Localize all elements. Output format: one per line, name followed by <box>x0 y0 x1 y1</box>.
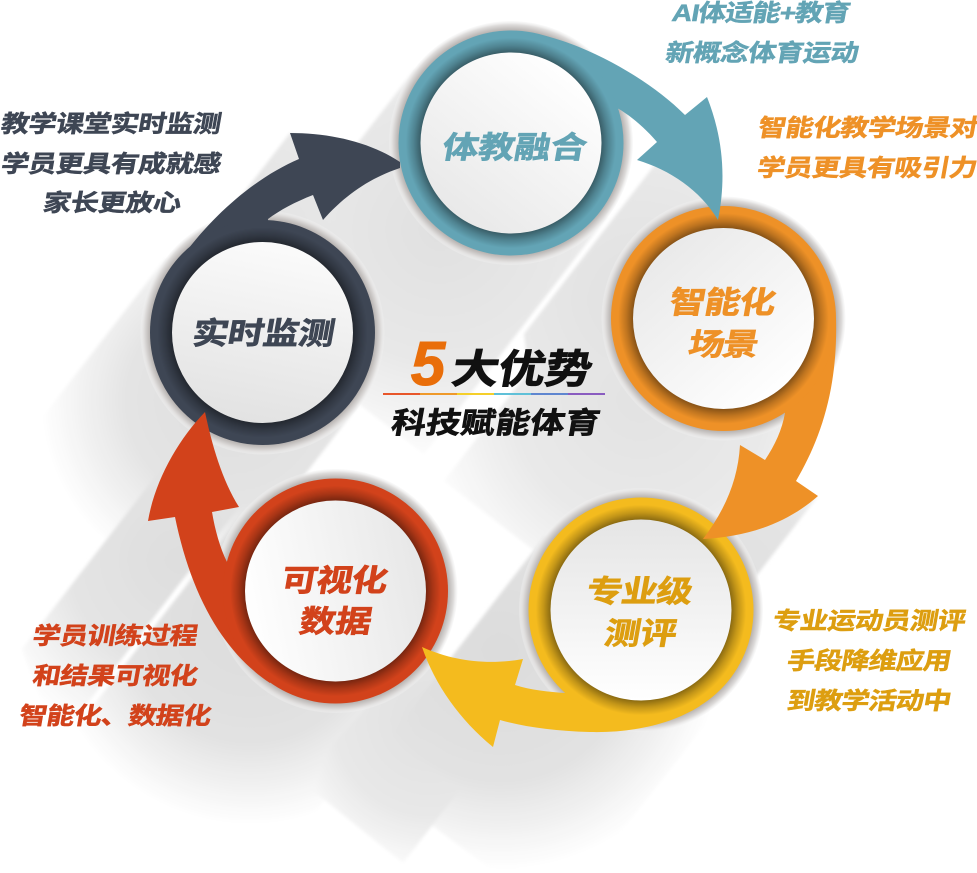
text: dark callout: 家长更放心 <box>41 189 184 216</box>
node: 专业级测评 <box>422 498 754 747</box>
text: dark callout: 教学课堂实时监测 <box>0 110 224 137</box>
title: 5大优势: 大优势 <box>448 348 596 392</box>
ring: teal <box>398 30 624 256</box>
rainbow divider <box>383 393 605 395</box>
label: 智能化场景: 智能化 <box>667 286 779 320</box>
text: teal callout <box>664 0 861 66</box>
label: 体教融合: 体教融合 <box>440 131 590 165</box>
text: red callout: 和结果可视化 <box>31 662 200 689</box>
circle halos <box>140 21 846 732</box>
text: dark callout <box>0 110 224 216</box>
text: yellow callout: 专业运动员测评 <box>771 607 968 634</box>
arrow: teal <box>511 31 722 220</box>
label: 专业级测评: 测评 <box>602 617 680 651</box>
arrow: dark <box>157 133 400 332</box>
text: dark callout: 学员更具有成就感 <box>0 150 224 177</box>
label: 专业级测评: 专业级 <box>584 575 696 609</box>
subtitle: 科技赋能体育: 科技赋能体育 <box>389 407 603 439</box>
arrow: yellow <box>422 610 700 747</box>
text: yellow callout <box>771 607 968 714</box>
node: 体教融合 <box>398 30 722 256</box>
text: red callout: 学员训练过程 <box>31 622 200 649</box>
text: teal callout: 新概念体育运动 <box>664 39 861 66</box>
arrow: orange <box>703 318 836 539</box>
label: 可视化数据 <box>279 564 391 639</box>
text: red callout <box>17 622 214 729</box>
title: 5大优势 <box>411 330 596 399</box>
text: orange callout: 学员更具有吸引力 <box>755 154 977 181</box>
label: 可视化数据: 可视化 <box>279 564 391 598</box>
label: 智能化场景 <box>667 286 779 362</box>
text: orange callout <box>755 114 977 181</box>
long diagonal shadows <box>7 69 819 870</box>
label: 智能化场景: 场景 <box>686 329 762 362</box>
ring: dark <box>150 220 375 445</box>
node: 可视化数据 <box>148 412 448 704</box>
ring: orange <box>611 206 836 431</box>
ring: yellow <box>528 498 754 722</box>
label: 实时监测: 实时监测 <box>190 317 338 351</box>
text: yellow callout: 手段降维应用 <box>785 647 954 674</box>
node: 实时监测 <box>150 133 400 445</box>
arrow: red <box>148 412 335 683</box>
node: 智能化场景 <box>611 206 836 539</box>
ring: red <box>223 478 448 704</box>
label: 可视化数据: 数据 <box>297 605 375 639</box>
title: 5大优势: 5 <box>411 330 447 399</box>
text: orange callout: 智能化教学场景对 <box>756 114 977 141</box>
label: 专业级测评 <box>584 575 696 651</box>
text: yellow callout: 到教学活动中 <box>785 687 954 714</box>
text: red callout: 智能化、数据化 <box>17 702 214 729</box>
